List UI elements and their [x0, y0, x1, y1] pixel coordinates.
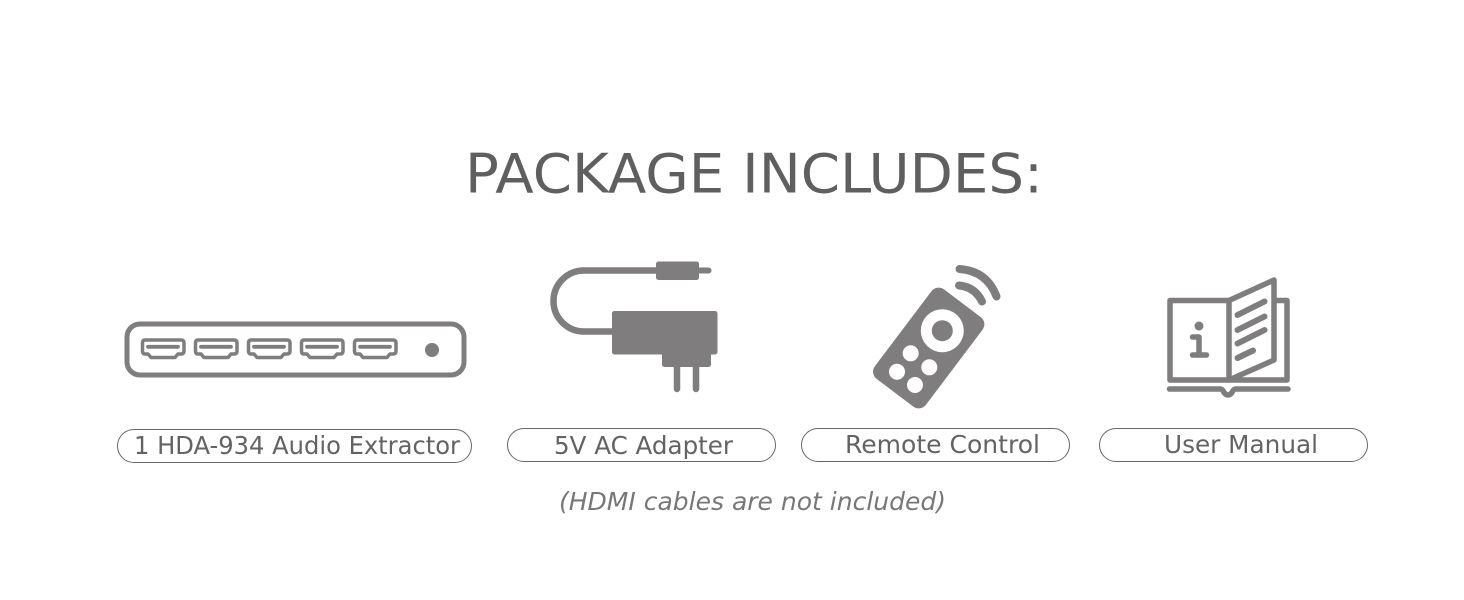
title: PACKAGE INCLUDES: [465, 142, 1043, 206]
item: audio extractor [118, 324, 472, 462]
icon: power adapter [553, 262, 718, 389]
label pill: remote control: Remote Control [845, 430, 1040, 459]
item: remote control [802, 269, 1070, 462]
note: cables not included: (HDMI cables are not included) [559, 487, 946, 516]
label pill: user manual: User Manual [1164, 430, 1318, 459]
icon: HDMI audio extractor [127, 324, 464, 375]
icon: open book manual [1170, 280, 1288, 395]
label pill: user manual [1100, 428, 1368, 462]
item: user manual [1100, 280, 1368, 462]
label pill: AC adapter [508, 428, 776, 462]
label pill: audio extractor: 1 HDA-934 Audio Extractor [134, 431, 461, 460]
label pill: AC adapter: 5V AC Adapter [554, 431, 734, 460]
label pill: remote control [802, 428, 1070, 462]
icon: remote control [869, 269, 996, 412]
item: AC adapter [508, 262, 776, 462]
